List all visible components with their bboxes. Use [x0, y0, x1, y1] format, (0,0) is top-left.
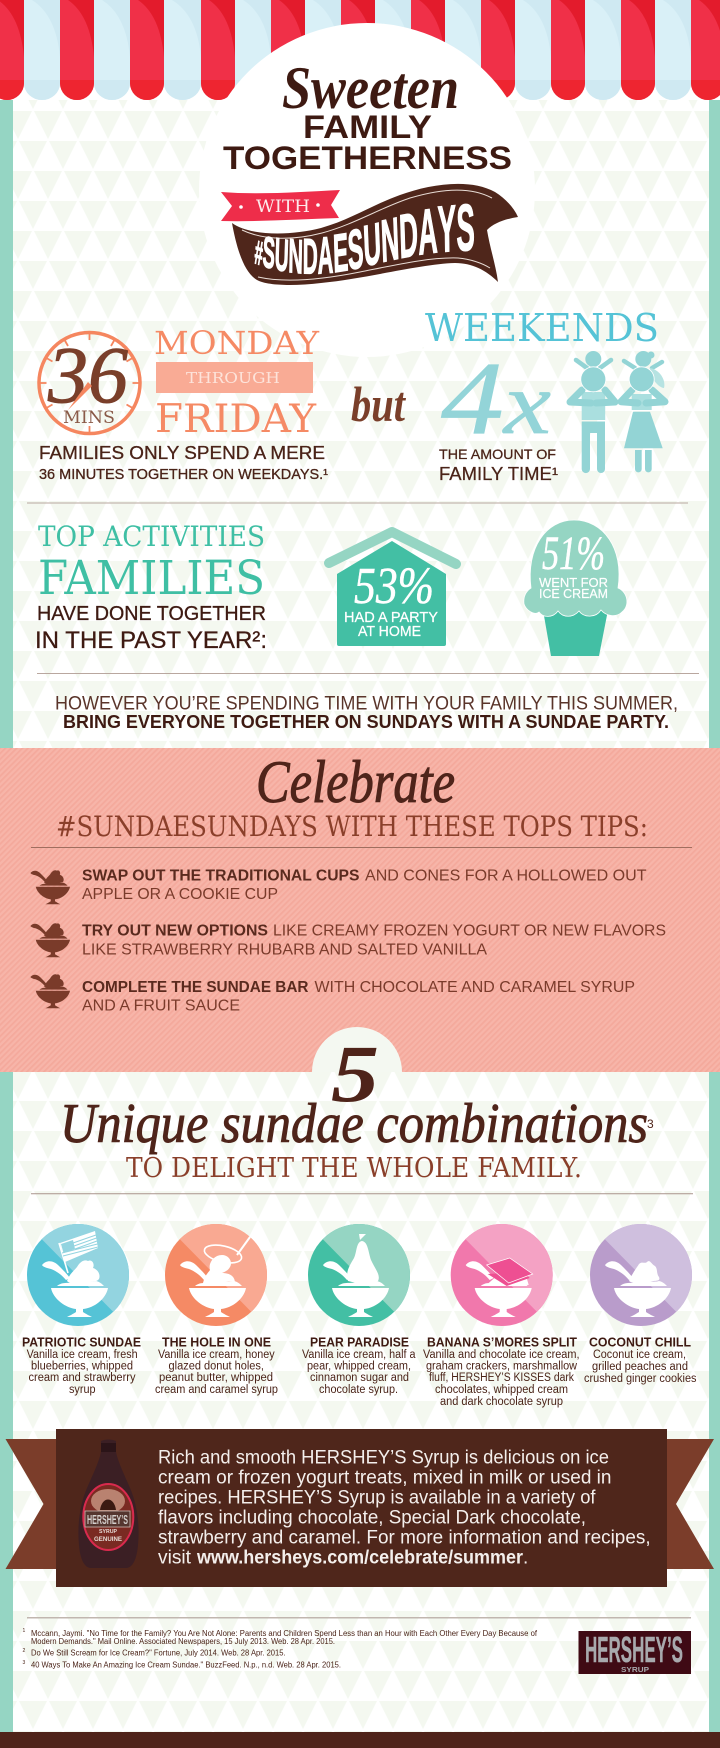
- brown wavy ribbon: [232, 184, 518, 285]
- house stat: 53%: [329, 532, 456, 646]
- families: FAMILIES: [38, 551, 265, 606]
- footnotes: [22, 1628, 538, 1670]
- right side bar: [709, 100, 720, 1732]
- title script line: Sweeten: [282, 55, 459, 121]
- tips subheading: #SUNDAESUNDAYS WITH THESE TOPS TIPS:: [56, 810, 648, 843]
- clock face: [39, 332, 140, 434]
- message line one: HOWEVER YOU’RE SPENDING TIME WITH YOUR FAMILY THIS SUMMER,: [55, 694, 678, 714]
- top activities: TOP ACTIVITIES: [38, 520, 265, 553]
- name: PEAR PARADISE: [310, 1335, 409, 1350]
- awning: [0, 0, 720, 100]
- footnotes: Do We Still Scream for Ice Cream?" Fortune, July 2014. Web. 28 Apr. 2015.: [31, 1649, 286, 1658]
- went for: WENT FOR: [539, 575, 608, 590]
- left side bar: [0, 100, 13, 1732]
- tip 3 lead: COMPLETE THE SUNDAE BAR: [82, 979, 309, 996]
- description: syrup: [69, 1384, 96, 1396]
- panel: hersheys syrup: [6, 1429, 714, 1587]
- ribbon inline top: [242, 190, 492, 238]
- description: cream and strawberry: [28, 1372, 136, 1384]
- hersheys logo: SYRUP: [621, 1667, 649, 1674]
- summer message: [55, 694, 678, 732]
- weekday caption: [39, 443, 328, 483]
- monday: MONDAY: [154, 324, 320, 362]
- icon: sundae: [30, 974, 70, 1008]
- through label: THROUGH: [186, 369, 280, 387]
- number 5: 5: [331, 1028, 379, 1119]
- card: banana smores split: [423, 1335, 580, 1408]
- left ribbon tail: [6, 1439, 56, 1569]
- syrup description: www.hersheys.com/celebrate/summer: [196, 1547, 524, 1568]
- ice cream cup: [543, 610, 608, 656]
- icon: sundae: [30, 870, 70, 904]
- description: [423, 1349, 580, 1408]
- 53 percent: 53%: [354, 558, 434, 615]
- icon: hole in one sundae: [165, 1224, 267, 1326]
- description: [27, 1349, 138, 1396]
- description: fluff, HERSHEY’S KISSES dark: [429, 1372, 574, 1384]
- 36 numeral: 36: [47, 332, 128, 420]
- description: and dark chocolate syrup: [440, 1396, 563, 1408]
- stat caption line one: THE AMOUNT OF: [439, 446, 556, 462]
- syrup description: recipes. HERSHEY’S Syrup is available in a variety of: [158, 1487, 596, 1508]
- footnotes: Mccann, Jaymi. "No Time for the Family? You Are Not Alone: Parents and Children Spend Less than an Hour with Each Other Every Day Because of: [31, 1629, 538, 1638]
- caption line two: 36 MINUTES TOGETHER ON WEEKDAYS.¹: [39, 467, 328, 483]
- top activities heading: [35, 520, 267, 654]
- icon: mother with child on shoulders: [621, 351, 665, 472]
- ice cream label: ICE CREAM: [539, 586, 608, 601]
- hersheys logo: [578, 1629, 691, 1674]
- tip 2 line two: LIKE STRAWBERRY RHUBARB AND SALTED VANILLA: [82, 942, 487, 959]
- had a party: HAD A PARTY: [344, 609, 438, 626]
- 4x stat: [439, 341, 558, 484]
- card: coconut chill: [584, 1335, 697, 1385]
- tip 3 rest: WITH CHOCOLATE AND CARAMEL SYRUP: [314, 979, 635, 996]
- tip 1 lead: SWAP OUT THE TRADITIONAL CUPS: [82, 868, 360, 884]
- description: graham crackers, marshmallow: [426, 1360, 578, 1372]
- clock: 36 mins: [38, 332, 140, 434]
- tip 2 rest: LIKE CREAMY FROZEN YOGURT OR NEW FLAVORS: [273, 923, 666, 940]
- 4x numeral: 4x: [441, 341, 551, 456]
- name: THE HOLE IN ONE: [162, 1335, 271, 1350]
- title line: family: FAMILY: [303, 109, 432, 145]
- syrup description: [158, 1447, 651, 1568]
- white arch behind title: [199, 23, 535, 357]
- caption line one: FAMILIES ONLY SPEND A MERE: [39, 443, 325, 463]
- but connector: but: [351, 376, 407, 432]
- at home: AT HOME: [358, 623, 421, 640]
- description: Vanilla ice cream, fresh: [27, 1349, 138, 1361]
- description: cream and caramel syrup: [155, 1384, 278, 1396]
- description: [302, 1349, 416, 1396]
- red ribbon: [221, 190, 340, 221]
- card: patriotic sundae: [22, 1335, 141, 1396]
- description: chocolate syrup.: [319, 1384, 398, 1396]
- combinations heading: [60, 1027, 654, 1184]
- in the past year: IN THE PAST YEAR²:: [35, 627, 267, 654]
- title line: togetherness: TOGETHERNESS: [223, 140, 512, 176]
- ribbon inline bottom: [258, 258, 490, 280]
- right ribbon tail: [667, 1439, 714, 1569]
- tip 2: [30, 923, 666, 959]
- syrup description: Rich and smooth HERSHEY’S Syrup is delicious on ice: [158, 1447, 609, 1468]
- icon: syrup bottle: GENUINE: [94, 1537, 122, 1543]
- to delight: TO DELIGHT THE WHOLE FAMILY.: [126, 1153, 582, 1184]
- name: BANANA S’MORES SPLIT: [427, 1335, 577, 1350]
- bottom bar: [0, 1732, 720, 1748]
- clock hand: [68, 382, 92, 410]
- footnotes: 2: [22, 1648, 26, 1654]
- icon: sundae: [30, 923, 70, 957]
- description: Vanilla ice cream, half a: [302, 1349, 416, 1361]
- description: peanut butter, whipped: [159, 1372, 273, 1384]
- description: glazed donut holes,: [168, 1360, 264, 1372]
- celebrate heading: Celebrate: [256, 749, 455, 815]
- number badge: [312, 1027, 402, 1072]
- with label: WITH: [256, 197, 310, 216]
- footnotes: 3: [22, 1660, 26, 1666]
- icon: father with child on shoulders: [570, 351, 615, 473]
- syrup description: .: [523, 1547, 528, 1568]
- card: the hole in one: [155, 1335, 278, 1396]
- friday: FRIDAY: [155, 397, 317, 442]
- 51 percent: 51%: [542, 527, 605, 580]
- name: COCONUT CHILL: [589, 1335, 691, 1350]
- stat caption line two: FAMILY TIME¹: [439, 464, 558, 484]
- tip 3 line two: AND A FRUIT SAUCE: [82, 998, 240, 1015]
- have done together: HAVE DONE TOGETHER: [37, 603, 266, 625]
- icon: coconut chill sundae: [590, 1224, 692, 1326]
- weekends heading: WEEKENDS: [425, 306, 659, 350]
- unique sundae combinations: Unique sundae combinations: [60, 1093, 648, 1155]
- description: crushed ginger cookies: [584, 1373, 697, 1385]
- description: Vanilla and chocolate ice cream,: [423, 1349, 580, 1361]
- description: pear, whipped cream,: [307, 1360, 411, 1372]
- description: chocolates, whipped cream: [435, 1384, 568, 1396]
- tip 1: [30, 868, 647, 904]
- syrup description: strawberry and caramel. For more information and recipes,: [158, 1527, 651, 1548]
- pink band: [0, 748, 720, 1072]
- icon: banana smores sundae: [451, 1224, 553, 1326]
- tip 1 line two: APPLE OR A COOKIE CUP: [82, 886, 278, 903]
- mins label: MINS: [63, 408, 115, 428]
- footnotes: 40 Ways To Make An Amazing Ice Cream Sundae." BuzzFeed. N.p., n.d. Web. 28 Apr. 2015.: [31, 1661, 341, 1670]
- description: Coconut ice cream,: [593, 1349, 686, 1361]
- icon: syrup bottle: SYRUP: [99, 1529, 118, 1535]
- tip 1 rest: AND CONES FOR A HOLLOWED OUT: [365, 868, 647, 884]
- clock ticks: [38, 332, 140, 434]
- through bar: [156, 362, 313, 393]
- tip 2 lead: TRY OUT NEW OPTIONS: [82, 923, 268, 940]
- syrup description: visit: [158, 1547, 192, 1568]
- ice cream scoop: [524, 520, 627, 616]
- syrup description: flavors including chocolate, Special Dark chocolate,: [158, 1507, 586, 1528]
- description: Vanilla ice cream, honey: [158, 1349, 275, 1361]
- footnotes: Modern Demands." Mail Online. Associated Newspapers, 15 July 2013. Web. 28 Apr. 2015.: [31, 1637, 335, 1646]
- description: grilled peaches and: [592, 1361, 688, 1373]
- house roof: [329, 532, 456, 564]
- message line two: BRING EVERYONE TOGETHER ON SUNDAYS WITH A SUNDAE PARTY.: [63, 712, 669, 732]
- panel: celebrate tips: [0, 748, 720, 1072]
- ribbon dots: [239, 203, 320, 209]
- footnote mark 3: 3: [647, 1117, 654, 1131]
- description: blueberries, whipped: [31, 1360, 133, 1372]
- house body: [337, 541, 446, 646]
- description: [155, 1349, 278, 1396]
- syrup description: cream or frozen yogurt treats, mixed in milk or used in: [158, 1467, 612, 1488]
- brown box: [56, 1429, 667, 1587]
- description: [584, 1349, 697, 1385]
- icon: syrup bottle: [78, 1440, 139, 1568]
- icon: pear paradise sundae: [308, 1224, 410, 1326]
- ice cream stat: 51%: [524, 520, 627, 656]
- hashtag text: #SUNDAESUNDAYS: [254, 204, 474, 274]
- name: PATRIOTIC SUNDAE: [22, 1335, 141, 1350]
- hashtag banner: [221, 184, 518, 285]
- title: [223, 55, 512, 176]
- monday through friday: [154, 324, 320, 442]
- description: cinnamon sugar and: [310, 1372, 409, 1384]
- icon: patriotic sundae: [27, 1224, 129, 1326]
- icon: syrup bottle: HERSHEY’S: [87, 1512, 128, 1527]
- footnotes: 1: [22, 1628, 26, 1634]
- card: pear paradise: [302, 1335, 416, 1396]
- tip 3: [30, 974, 635, 1015]
